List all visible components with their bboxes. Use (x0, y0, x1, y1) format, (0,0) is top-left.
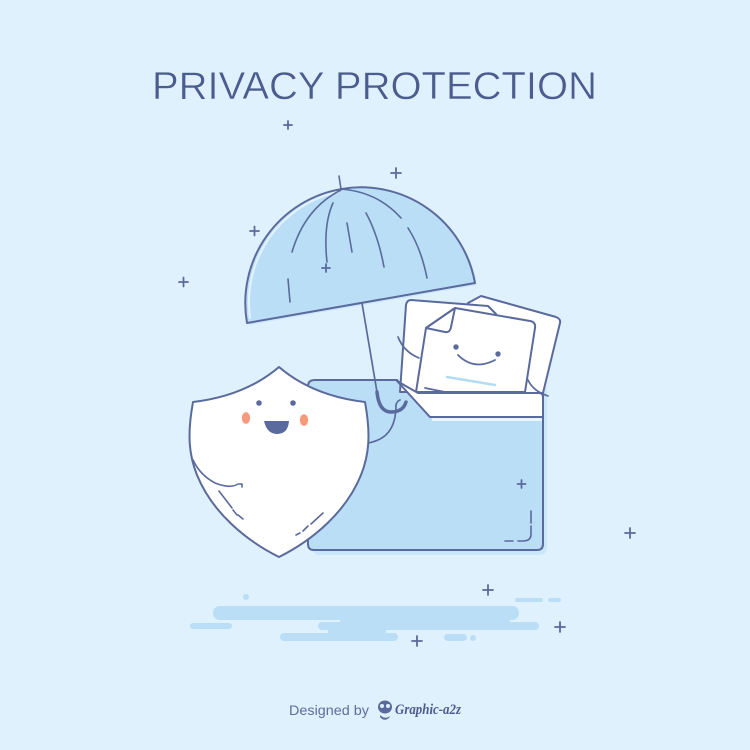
umbrella handle (362, 303, 406, 412)
logo icon (378, 700, 392, 720)
shield eyes (256, 400, 262, 406)
umbrella hook (377, 392, 406, 412)
canopy tip (339, 176, 341, 189)
designed by text: Designed by (289, 702, 369, 718)
canopy ribs (288, 189, 427, 302)
canopy shadow (247, 189, 477, 325)
folder body (308, 380, 543, 550)
title: PRIVACY PROTECTION (152, 65, 597, 108)
folder front flap (397, 381, 543, 417)
folder back and body (308, 380, 547, 555)
sparkle plus marks (179, 121, 635, 646)
folder flap highlight (432, 418, 542, 421)
shield character (190, 367, 368, 557)
umbrella canopy (245, 187, 475, 323)
shield body (190, 367, 368, 557)
front document (416, 308, 535, 392)
document face (447, 344, 501, 385)
folder corner stitching (505, 511, 531, 541)
umbrella shaft (362, 303, 377, 392)
middle document (400, 300, 520, 392)
back document (468, 296, 560, 393)
folder right edge (542, 393, 544, 544)
document arms (398, 337, 548, 396)
shield arm holding umbrella (368, 400, 400, 443)
documents (398, 296, 560, 396)
document fold (426, 308, 455, 332)
shield arm (193, 460, 242, 487)
logo text: Graphic-a2z (395, 702, 461, 718)
umbrella (245, 176, 477, 325)
shield mouth (264, 421, 289, 434)
folder shadow (312, 384, 547, 555)
ground puddles (190, 594, 561, 641)
shield cheeks (242, 412, 250, 424)
shield dashes (219, 491, 323, 535)
canopy highlight (249, 192, 338, 318)
footer credit (289, 700, 461, 720)
